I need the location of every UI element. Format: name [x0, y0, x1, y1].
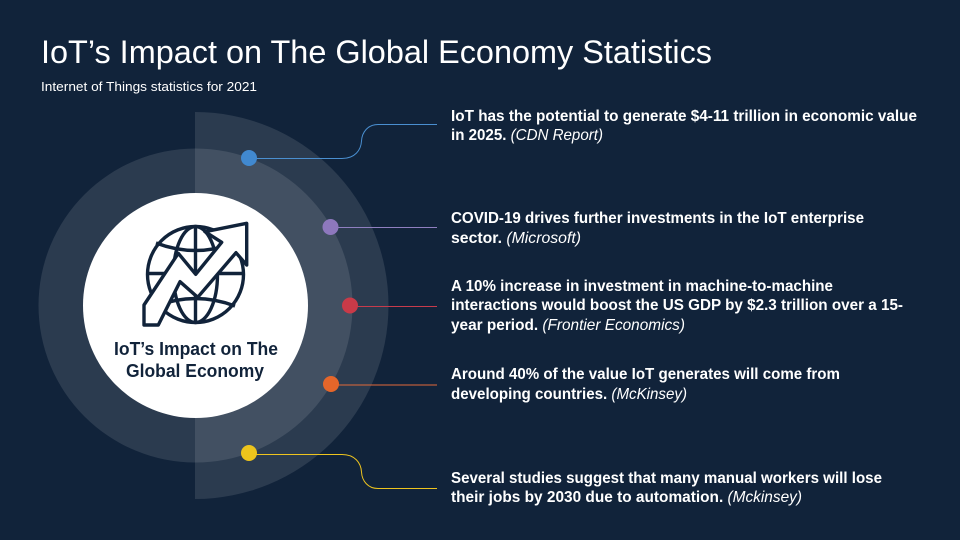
- statement 5: their jobs by 2030 due to automation. (Mckinsey): [451, 489, 802, 506]
- statement 1: IoT has the potential to generate $4-11 trillion in economic value: [451, 108, 917, 125]
- statement 4: developing countries. (McKinsey): [451, 386, 687, 403]
- middle ring: [38, 148, 352, 462]
- statement 4: [451, 366, 840, 403]
- statement 5: Several studies suggest that many manual workers will lose: [451, 470, 882, 487]
- statement 3: [451, 278, 903, 334]
- statement 2: COVID-19 drives further investments in the IoT enterprise: [451, 210, 864, 227]
- connector: red: [342, 298, 437, 314]
- statement 1: [451, 108, 917, 144]
- subtitle: Internet of Things statistics for 2021: [41, 79, 257, 94]
- center label: Global Economy: [126, 361, 264, 381]
- center white circle: [83, 193, 308, 418]
- connector: yellow: [241, 445, 437, 488]
- statement 2: [451, 210, 864, 247]
- connector: blue: [241, 124, 437, 166]
- statement 4: Around 40% of the value IoT generates will come from: [451, 366, 840, 383]
- title: IoT’s Impact on The Global Economy Statistics: [41, 34, 712, 70]
- connector: orange: [323, 376, 437, 392]
- outer half ring: [195, 112, 388, 499]
- center label: IoT’s Impact on The: [114, 339, 278, 359]
- connector: purple: [322, 219, 437, 235]
- center label: [114, 339, 278, 381]
- statement 3: interactions would boost the US GDP by $2.3 trillion over a 15-: [451, 297, 903, 314]
- statement 3: A 10% increase in investment in machine-to-machine: [451, 278, 833, 295]
- concentric circle diagram: [38, 112, 388, 499]
- statement 5: [451, 470, 882, 506]
- statement 2: sector. (Microsoft): [451, 230, 581, 247]
- statement 1: in 2025. (CDN Report): [451, 127, 603, 144]
- icon: globe with rising arrow: [144, 223, 247, 325]
- statement 3: year period. (Frontier Economics): [451, 317, 685, 334]
